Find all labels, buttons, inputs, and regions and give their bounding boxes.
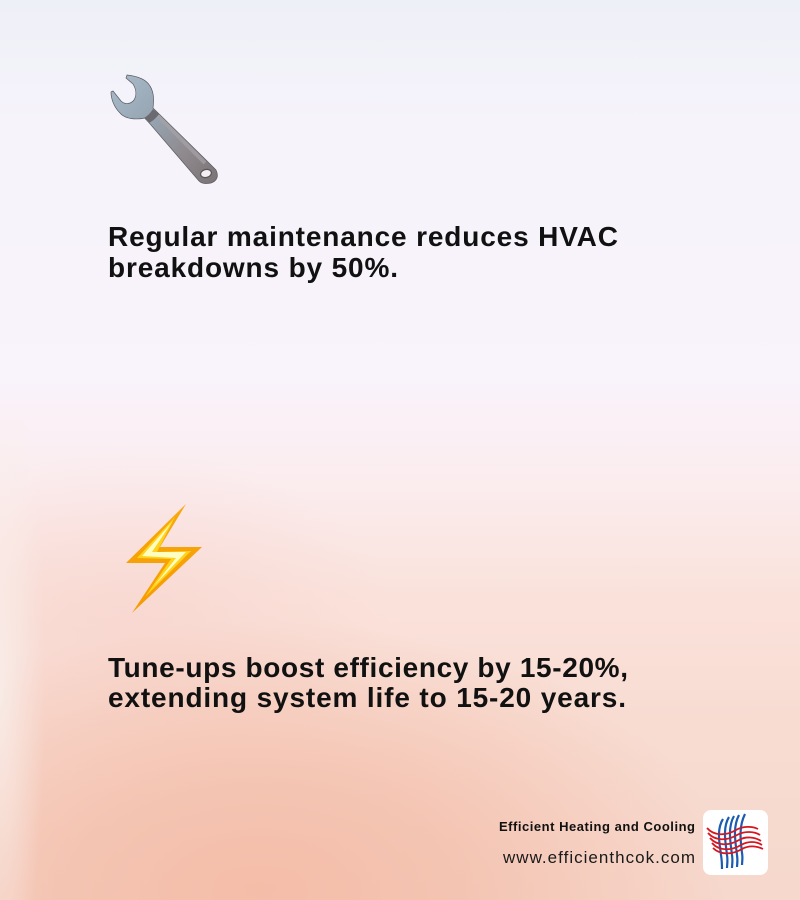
footer: company name: Efficient Heating and Cooling [499, 819, 695, 834]
text: maintenance: Regular maintenance reduces HVAC [108, 221, 618, 252]
text: tune-ups: extending system life to 15-20 years. [108, 682, 626, 713]
icon: wrench [111, 75, 217, 184]
text: tune-ups [108, 652, 628, 713]
text: tune-ups: Tune-ups boost efficiency by 15-20%, [108, 652, 628, 683]
footer: website: www.efficienthcok.com [502, 848, 695, 867]
text: maintenance [108, 221, 618, 283]
logo [703, 810, 768, 875]
text: maintenance: breakdowns by 50%. [108, 252, 398, 283]
icon: lightning bolt [126, 504, 202, 613]
